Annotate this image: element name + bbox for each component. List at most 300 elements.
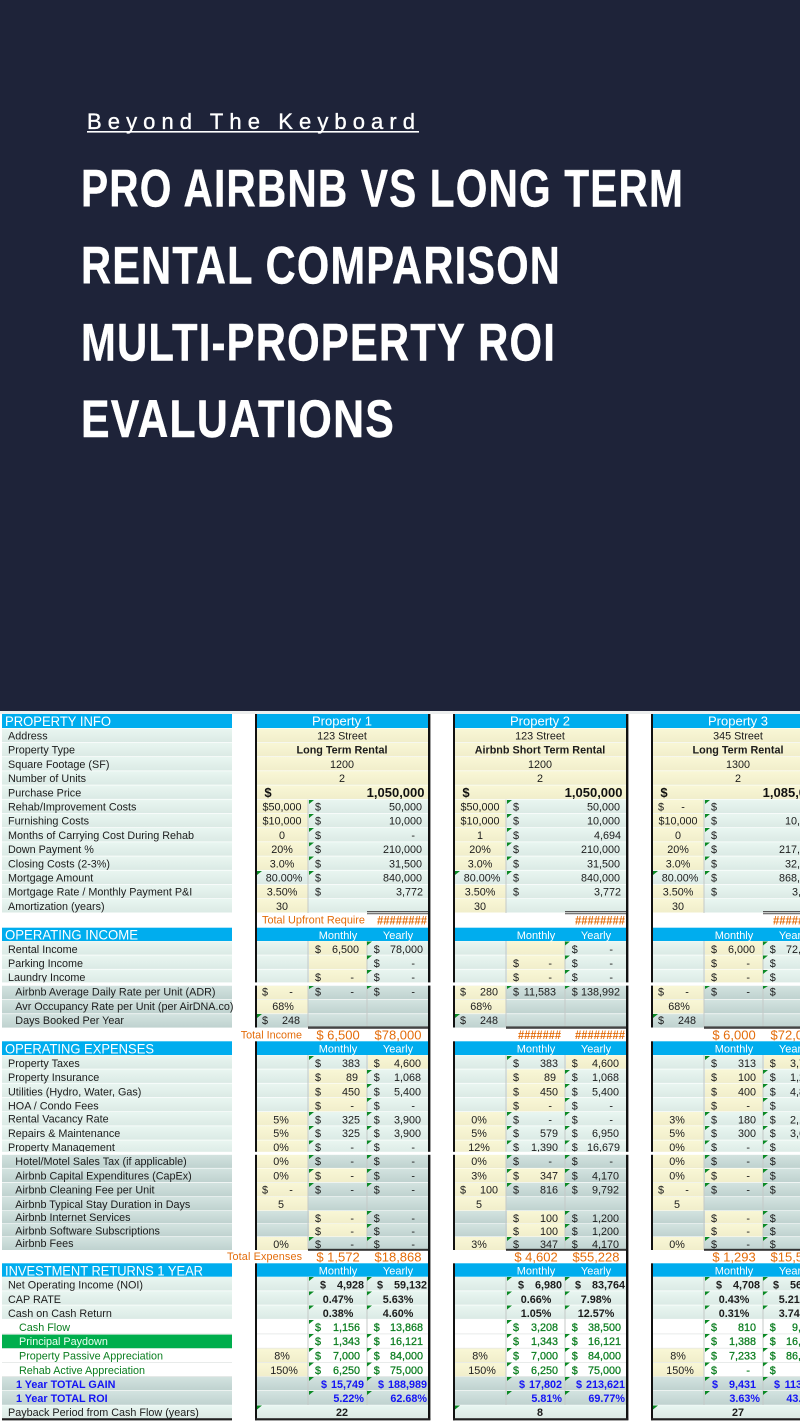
property 3 investment returns: $ [712, 1379, 718, 1391]
property 1 operating expenses: - [350, 1184, 354, 1196]
property 2 operating expenses: - [609, 1100, 613, 1112]
property 2 operating expenses: $ [572, 1058, 578, 1070]
property 2 investment returns: $ [518, 1280, 524, 1292]
property 1 info values: 3,772 [396, 887, 423, 899]
property 1 info values: ######## [377, 914, 427, 928]
property 1 investment returns: 13,868 [390, 1322, 423, 1334]
property 1 operating expenses: $ [315, 1114, 321, 1126]
property 3 operating expenses: $ [770, 1086, 776, 1098]
property 2 investment returns: 16,121 [588, 1336, 621, 1348]
property 3 info values: $ [711, 816, 717, 828]
property 2 operating expenses: $ [572, 1239, 578, 1251]
property 3 operating expenses: $ [711, 1239, 717, 1251]
brand tagline: Beyond The Keyboard [87, 109, 415, 134]
property 2 operating expenses: 450 [540, 1086, 558, 1098]
property 2 investment returns: 1.05% [521, 1308, 552, 1320]
property 3 investment returns: $ [770, 1365, 776, 1377]
property 2 operating expenses: $ [513, 1156, 519, 1168]
property 3 operating expenses: $ [711, 1184, 717, 1196]
property 1 info values: 3.50% [267, 887, 298, 899]
property 2 operating income: Monthly [517, 930, 556, 942]
property 2 investment returns: 7,000 [531, 1350, 558, 1362]
labels: operating expenses: Airbnb Software Subscriptions [15, 1226, 161, 1238]
property 1 investment returns: $ [321, 1379, 327, 1391]
property 1 operating income: $ [374, 986, 380, 998]
property 2 operating income [460, 930, 625, 1042]
property 1 operating expenses: - [350, 1239, 354, 1251]
property 1 operating expenses: $ [315, 1072, 321, 1084]
labels: investment returns: Principal Paydown [19, 1336, 108, 1348]
property 2 operating expenses: $ [513, 1058, 519, 1070]
labels: investment returns: 1 Year TOTAL GAIN [16, 1379, 116, 1391]
property 1 info values: - [411, 830, 415, 842]
property 3 info values: 1300 [726, 759, 750, 771]
property 2 investment returns: 6,980 [535, 1280, 562, 1292]
property 3 investment returns: $ [774, 1379, 780, 1391]
property 2 operating expenses: 1,200 [592, 1226, 619, 1238]
property 1 investment returns: Yearly [383, 1266, 414, 1278]
property 2 operating expenses: $ [572, 1114, 578, 1126]
property 3 info values: $ [711, 830, 717, 842]
property 2 operating expenses: $ [513, 1072, 519, 1084]
property 3 investment returns: 9,431 [729, 1379, 756, 1391]
property 2 operating expenses: 12% [468, 1142, 490, 1154]
title [81, 160, 684, 449]
property 1 info values: 3.0% [270, 858, 295, 870]
property 2 investment returns: $ [513, 1336, 519, 1348]
property 3 operating expenses: 180 [738, 1114, 756, 1126]
property 3 operating expenses: $ [770, 1170, 776, 1182]
property 3 operating income: $ [770, 944, 776, 956]
spreadsheet strip edge [0, 711, 800, 714]
property 2 investment returns: 150% [468, 1365, 496, 1377]
property 2 operating expenses: 3% [471, 1239, 487, 1251]
property 1 operating expenses: - [350, 1170, 354, 1182]
property 1 info values: $ [264, 785, 272, 800]
property 2 info values: $ [513, 802, 519, 814]
property 1 info values: $ [315, 872, 321, 884]
property 3 investment returns: 27 [732, 1407, 744, 1419]
property 1 info values: 840,000 [383, 872, 422, 884]
labels: operating expenses: HOA / Condo Fees [8, 1100, 99, 1112]
property 2 operating income: $ [460, 986, 466, 998]
property 3 operating expenses: - [746, 1156, 750, 1168]
property 3 operating expenses: $ [770, 1058, 776, 1070]
property 3 info values: 80.00% [662, 872, 699, 884]
property 3 operating expenses: - [746, 1100, 750, 1112]
labels: property info: Closing Costs (2-3%) [8, 858, 110, 870]
property 2 operating income: - [609, 944, 613, 956]
labels: operating income: Rental Income [8, 944, 78, 956]
property 1 heading: Property 1 [312, 714, 372, 728]
property 2 operating expenses: $ [513, 1213, 519, 1225]
property 3 operating expenses: $ [658, 1184, 664, 1196]
property 3 operating expenses: 0% [669, 1156, 685, 1168]
property 2 operating income: - [609, 958, 613, 970]
property 2 operating expenses: $ [513, 1184, 519, 1196]
property 1 operating expenses: - [350, 1226, 354, 1238]
property 2 investment returns: 3,208 [531, 1322, 558, 1334]
property 1 operating income: 78,000 [390, 944, 423, 956]
labels: property info: Mortgage Rate / Monthly Payment P&I [8, 887, 192, 899]
property 2 info values: $ [513, 830, 519, 842]
property 1 operating expenses: 3,900 [394, 1128, 421, 1140]
property 1 operating expenses: 0% [273, 1239, 289, 1251]
property 2 operating expenses: - [548, 1114, 552, 1126]
property 2 operating expenses: $ [572, 1226, 578, 1238]
title: EVALUATIONS [81, 390, 395, 449]
property 1 info values: 2 [339, 773, 345, 785]
property 1 investment returns: 84,000 [390, 1350, 423, 1362]
property 1 investment returns: 16,121 [390, 1336, 423, 1348]
property 2 operating expenses: - [548, 1100, 552, 1112]
property 2 investment returns: $ [513, 1322, 519, 1334]
section heading: operating expenses: OPERATING EXPENSES [5, 1040, 154, 1056]
property 1 operating expenses: $ [315, 1170, 321, 1182]
property 1 info values: 1,050,000 [367, 785, 424, 800]
property 1 info values: 20% [271, 844, 293, 856]
property 2 info values: 10,000 [587, 816, 620, 828]
property 1 investment returns: 22 [336, 1407, 348, 1419]
labels: operating income [8, 944, 234, 1027]
property 3 info values: 2 [735, 773, 741, 785]
property 2 operating expenses: 3% [471, 1170, 487, 1182]
property 1 operating expenses: 1,068 [394, 1072, 421, 1084]
property 2 investment returns: 0.66% [521, 1294, 552, 1306]
property 2 info values: $ [513, 858, 519, 870]
property 1 operating expenses: 5% [273, 1114, 289, 1126]
property 2 info values: 30 [474, 901, 486, 913]
property 1 investment returns: 75,000 [390, 1365, 423, 1377]
property 2 operating expenses: $ [572, 1213, 578, 1225]
property 2 investment returns: $ [572, 1322, 578, 1334]
property 1 info values: $50,000 [262, 802, 302, 814]
property 1 operating income: - [289, 986, 293, 998]
property 2 operating income: ####### [518, 1028, 561, 1042]
labels: operating expenses: Airbnb Capital Expenditures (CapEx) [15, 1170, 192, 1182]
property 2 investment returns: 6,250 [531, 1365, 558, 1377]
property 1 operating expenses: $ [374, 1142, 380, 1154]
property 2 investment returns: $ [519, 1379, 525, 1391]
labels: operating expenses: Airbnb Cleaning Fee per Unit [15, 1184, 155, 1196]
property 3 info values: 3.50% [663, 887, 694, 899]
property 3 info values: 20% [667, 844, 689, 856]
property 1 operating expenses: - [411, 1226, 415, 1238]
property 3 investment returns [666, 1266, 800, 1419]
property 3 operating expenses: $ [770, 1142, 776, 1154]
property 2 investment returns: 84,000 [588, 1350, 621, 1362]
property 1 operating income: 6,500 [332, 944, 359, 956]
property 2 info values: 31,500 [587, 858, 620, 870]
property 3 operating income: $ [711, 958, 717, 970]
property 1 investment returns: 62.68% [390, 1393, 427, 1405]
property 2 info values [460, 730, 625, 928]
property 2 operating expenses: $55,228 [572, 1250, 620, 1264]
property 2 operating expenses: 4,170 [592, 1170, 619, 1182]
property 3 operating income: $ [711, 944, 717, 956]
labels: investment returns [2, 1280, 232, 1419]
property 1 operating expenses: $ [315, 1226, 321, 1238]
property 1 operating expenses: Yearly [383, 1044, 414, 1056]
property 1 operating expenses: - [350, 1213, 354, 1225]
property 3 operating income: $ [711, 972, 717, 984]
panel: property 1 column [227, 714, 430, 1420]
property 2 operating expenses: 1,390 [531, 1142, 558, 1154]
property 3 operating income: $ [658, 1015, 664, 1027]
labels: investment returns: Net Operating Income (NOI) [8, 1280, 143, 1292]
property 2 operating income: $ [513, 986, 519, 998]
property 1 operating expenses: Total Expenses [227, 1251, 303, 1263]
property 1 operating income: $ [315, 972, 321, 984]
property 1 investment returns: $ [315, 1365, 321, 1377]
property 2 info values: 3.50% [465, 887, 496, 899]
labels: operating expenses: Rental Vacancy Rate [8, 1114, 109, 1126]
labels: operating expenses: Utilities (Hydro, Water, Gas) [8, 1086, 141, 1098]
property 2 info values: ######## [575, 914, 625, 928]
property 1 operating income: $ [315, 944, 321, 956]
property 1 operating expenses: - [411, 1156, 415, 1168]
property 1 operating expenses: $ [374, 1239, 380, 1251]
property 2 info values: 3.0% [468, 858, 493, 870]
property 3 operating expenses: $ [711, 1086, 717, 1098]
property 2 investment returns: 12.57% [578, 1308, 615, 1320]
property 2 investment returns: 8 [537, 1407, 543, 1419]
property 2 operating income: $ [572, 958, 578, 970]
property 1 operating expenses: $ [374, 1128, 380, 1140]
labels: operating expenses [8, 1058, 192, 1250]
property 2 operating expenses: 347 [540, 1239, 558, 1251]
property 1 info values: 50,000 [389, 802, 422, 814]
property 2 investment returns: 5.81% [531, 1393, 562, 1405]
labels: operating expenses: Repairs & Maintenance [8, 1128, 120, 1140]
property 2 info values: Airbnb Short Term Rental [475, 745, 605, 757]
property 1 operating income: $78,000 [374, 1028, 422, 1042]
property 1 operating expenses: $ [315, 1213, 321, 1225]
title: RENTAL COMPARISON [81, 236, 561, 296]
property 2 info values: 210,000 [581, 844, 620, 856]
property 2 info values: 2 [537, 773, 543, 785]
property 3 investment returns: 0.31% [719, 1308, 750, 1320]
property 2 operating expenses: 5,400 [592, 1086, 619, 1098]
property 2 operating expenses: 4,600 [592, 1058, 619, 1070]
property 1 info values: 30 [276, 901, 288, 913]
property 1 operating income: Total Income [241, 1030, 302, 1042]
property 2 operating income: - [548, 972, 552, 984]
property 1 info values: Long Term Rental [297, 745, 387, 757]
property 1 operating expenses: - [411, 1100, 415, 1112]
property 1 info values: $10,000 [262, 816, 302, 828]
property 2 operating income: 11,583 [524, 986, 556, 998]
panel: property 3 column [651, 714, 800, 1420]
property 2 info values: 840,000 [581, 872, 620, 884]
labels: property info: Furnishing Costs [8, 816, 90, 828]
property 1 operating expenses: 0% [273, 1142, 289, 1154]
labels: investment returns: Cash Flow [19, 1322, 70, 1334]
property 1 investment returns: $ [378, 1379, 384, 1391]
property 2 investment returns: Monthly [517, 1266, 556, 1278]
labels: property info: Property Type [8, 745, 75, 757]
property 1 operating expenses: 0% [273, 1156, 289, 1168]
property 1 investment returns: $ [374, 1350, 380, 1362]
property 2 operating expenses: 383 [540, 1058, 558, 1070]
property 2 operating expenses: 5% [471, 1128, 487, 1140]
property 2 operating income: 280 [480, 986, 498, 998]
labels: operating expenses: Airbnb Fees [15, 1238, 74, 1250]
section heading: operating expenses [2, 1040, 232, 1056]
property 1 operating expenses: - [411, 1142, 415, 1154]
property 2 info values: 1200 [528, 759, 552, 771]
property 3 operating expenses: $ [770, 1184, 776, 1196]
labels: investment returns: 1 Year TOTAL ROI [16, 1393, 108, 1405]
property 1 operating expenses: $ [374, 1114, 380, 1126]
property 1 operating expenses: $ [315, 1086, 321, 1098]
property 3 operating expenses: - [746, 1239, 750, 1251]
property 3 operating expenses: - [746, 1170, 750, 1182]
property 2 investment returns: 213,621 [586, 1379, 625, 1391]
property 3 operating income: - [685, 986, 689, 998]
property 1 operating expenses: $ [374, 1086, 380, 1098]
property 1 operating expenses: - [411, 1184, 415, 1196]
property 1 info values [262, 730, 427, 928]
labels: investment returns: CAP RATE [8, 1294, 61, 1306]
property 1 operating expenses: - [350, 1100, 354, 1112]
property 2 info values: $ [462, 785, 470, 800]
property 2 info values: 123 Street [515, 730, 565, 742]
property 2 operating expenses: - [548, 1156, 552, 1168]
property 3 operating expenses: $ [711, 1072, 717, 1084]
labels: operating expenses: Hotel/Motel Sales Tax (if applicable) [15, 1156, 187, 1168]
property 1 info values: $ [315, 844, 321, 856]
property 1 investment returns: $ [374, 1365, 380, 1377]
property 2 info values: $ [513, 872, 519, 884]
property 1 operating expenses: Monthly [319, 1044, 358, 1056]
property 1 operating expenses: $ [374, 1156, 380, 1168]
property 1 investment returns: 8% [274, 1350, 290, 1362]
labels: property info: Square Footage (SF) [8, 759, 109, 771]
property 2 operating expenses: 89 [544, 1072, 556, 1084]
property 1 info values: $ [315, 887, 321, 899]
labels: investment returns: Rehab Active Appreciation [19, 1365, 145, 1377]
property 2 operating expenses: 0% [471, 1114, 487, 1126]
property 3 operating expenses: $ [711, 1170, 717, 1182]
property 2 operating income: 248 [480, 1015, 498, 1027]
property 1 operating income: $ [315, 986, 321, 998]
property 2 info values: 4,694 [594, 830, 621, 842]
property 1 operating expenses: 325 [342, 1114, 360, 1126]
property 1 operating income: - [411, 958, 415, 970]
property 2 investment returns: $ [576, 1379, 582, 1391]
property 2 operating income: $ [572, 972, 578, 984]
property 1 operating expenses: $ [262, 1184, 268, 1196]
dark navy hero background [0, 0, 800, 711]
property 1 operating expenses: 450 [342, 1086, 360, 1098]
property 3 operating expenses [658, 1044, 800, 1264]
property 1 operating expenses: - [350, 1156, 354, 1168]
property 1 operating expenses: 5,400 [394, 1086, 421, 1098]
property 3 operating expenses: 0% [669, 1142, 685, 1154]
property 3 operating income: 6,000 [728, 944, 755, 956]
property 2 operating income: $ [572, 986, 578, 998]
property 1 operating income: Monthly [319, 930, 358, 942]
property 3 operating expenses: $ [711, 1058, 717, 1070]
property 1 operating expenses: - [289, 1184, 293, 1196]
section heading: property info: PROPERTY INFO [5, 713, 111, 729]
property 3 operating income: $ [658, 986, 664, 998]
property 3 operating expenses: $ [770, 1100, 776, 1112]
property 1 operating income: - [411, 972, 415, 984]
property 3 info values: 30 [672, 901, 684, 913]
property 3 info values: 345 Street [713, 730, 763, 742]
property 1 operating income: $ 6,500 [316, 1028, 360, 1042]
property 2 heading: Property 2 [510, 714, 570, 728]
property 2 investment returns: $ [513, 1350, 519, 1362]
property 3 info values: $ [711, 887, 717, 899]
property 1 operating expenses: $ [315, 1058, 321, 1070]
labels: property info: Rehab/Improvement Costs [8, 802, 137, 814]
section heading: property info [2, 713, 232, 729]
panel: property 2 column [453, 714, 628, 1420]
property 2 operating expenses: $ [460, 1184, 466, 1196]
property 2 info values: $10,000 [460, 816, 500, 828]
property 3 operating expenses: 0% [669, 1239, 685, 1251]
property 2 operating expenses: $ [513, 1239, 519, 1251]
property 1 investment returns: 7,000 [333, 1350, 360, 1362]
property 1 operating expenses: - [411, 1213, 415, 1225]
property 1 operating expenses: $ 1,572 [316, 1250, 360, 1264]
labels: operating expenses: Property Insurance [8, 1072, 99, 1084]
property 2 operating expenses: $ 4,602 [514, 1250, 558, 1264]
property 1 investment returns: $ [374, 1336, 380, 1348]
property 1 info values: $ [315, 830, 321, 842]
property 3 operating income: $ 6,000 [712, 1028, 756, 1042]
labels: operating income: Laundry Income [8, 972, 85, 984]
property 2 info values: 80.00% [464, 872, 501, 884]
property 2 operating expenses: $ [513, 1100, 519, 1112]
property 3 operating income: - [746, 972, 750, 984]
property 3 operating income: - [746, 986, 750, 998]
property 2 investment returns: 17,802 [529, 1379, 562, 1391]
property 2 operating expenses: 100 [480, 1184, 498, 1196]
property 1 operating income: - [350, 972, 354, 984]
property 1 info values: 123 Street [317, 730, 367, 742]
property 1 operating expenses: 325 [342, 1128, 360, 1140]
property 1 investment returns: 0.47% [323, 1294, 354, 1306]
property 2 info values: 50,000 [587, 802, 620, 814]
section heading: investment returns: INVESTMENT RETURNS 1 YEAR [5, 1262, 203, 1278]
property 3 operating expenses: $ [711, 1128, 717, 1140]
property 3 operating expenses: 313 [738, 1058, 756, 1070]
property 3 operating expenses: 400 [738, 1086, 756, 1098]
property 3 operating expenses: 300 [738, 1128, 756, 1140]
property 3 investment returns: 4,708 [733, 1280, 760, 1292]
property 2 operating expenses: 816 [540, 1184, 558, 1196]
property 2 investment returns: 83,764 [592, 1280, 625, 1292]
property 1 investment returns: 1,156 [333, 1322, 360, 1334]
property 3 operating income: Monthly [715, 930, 754, 942]
property 2 operating income: $ [513, 958, 519, 970]
property 3 operating expenses: $ [711, 1114, 717, 1126]
property 1 operating income: 68% [272, 1001, 294, 1013]
property 3 investment returns: $ [711, 1365, 717, 1377]
property 2 investment returns: 75,000 [588, 1365, 621, 1377]
hero heading block [81, 109, 684, 449]
property 3 investment returns: 8% [670, 1350, 686, 1362]
property 3 operating expenses: - [685, 1184, 689, 1196]
property 1 operating income: $ [262, 1015, 268, 1027]
property 3 investment returns: $ [711, 1350, 717, 1362]
property 3 operating expenses: $ [711, 1142, 717, 1154]
property 1 operating expenses: $18,868 [374, 1250, 422, 1264]
